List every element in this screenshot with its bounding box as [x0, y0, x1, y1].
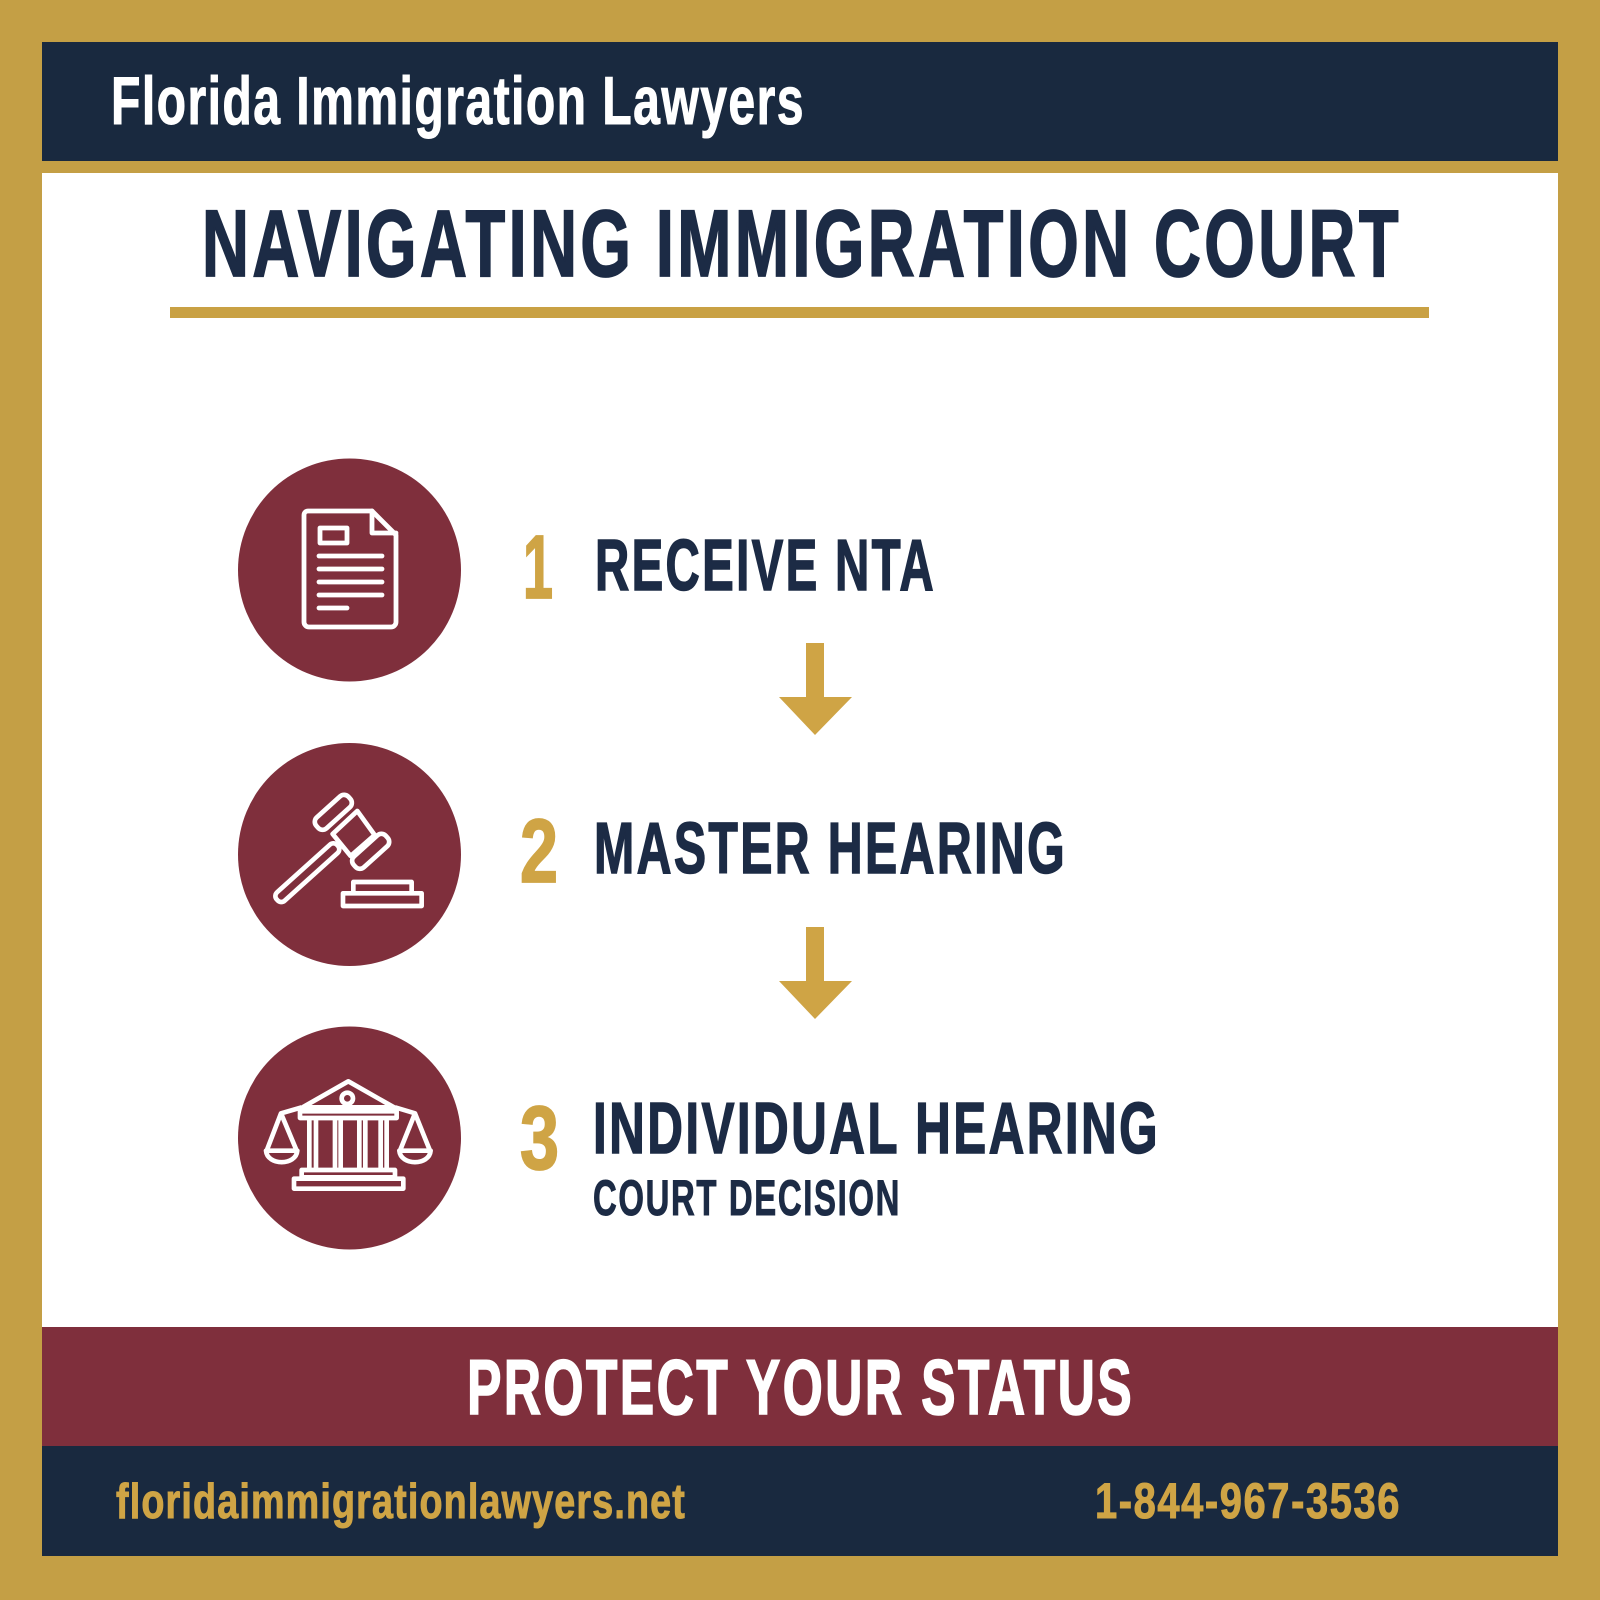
panel: call to action band — [42, 1327, 1558, 1446]
phone number: 1-844-967-3536 — [1095, 1473, 1401, 1529]
call to action text: PROTECT YOUR STATUS — [467, 1343, 1134, 1431]
panel: footer band — [42, 1446, 1558, 1556]
step 3 icon: courthouse and scales — [238, 1026, 461, 1250]
step 3 label: INDIVIDUAL HEARING — [593, 1089, 1160, 1169]
arrow: step 2 to 3 — [779, 927, 852, 1019]
step 2 icon: gavel — [238, 743, 461, 966]
title underline — [170, 307, 1429, 318]
step 1 number: 1 — [523, 518, 553, 618]
step 2 label: MASTER HEARING — [594, 809, 1067, 889]
step 3 number: 3 — [520, 1089, 559, 1189]
firm name: Florida Immigration Lawyers — [111, 63, 805, 139]
step 1 label: RECEIVE NTA — [595, 526, 936, 606]
step 1 icon: document — [238, 458, 461, 682]
arrow: step 1 to 2 — [779, 643, 852, 735]
panel: header band — [42, 42, 1558, 161]
panel: main content — [42, 173, 1558, 1327]
website: floridaimmigrationlawyers.net — [116, 1475, 686, 1529]
step 3 sublabel: COURT DECISION — [593, 1170, 901, 1226]
step 2 number: 2 — [520, 802, 558, 902]
